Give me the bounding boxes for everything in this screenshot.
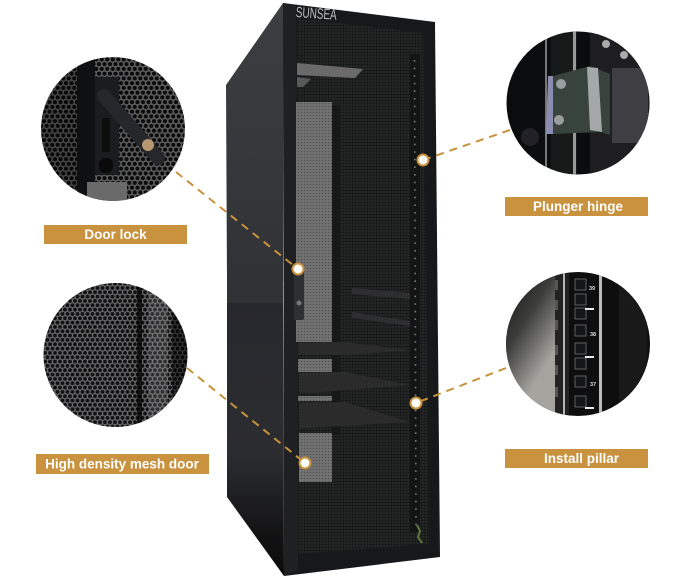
- unit ticks: [585, 308, 594, 409]
- detail circle: install pillar: [506, 272, 650, 416]
- top vent: [297, 63, 363, 78]
- connector: plunger hinge: [418, 130, 510, 166]
- mounting rail: [410, 54, 420, 532]
- cabinet side panel: [226, 3, 284, 576]
- unit numbers: 37: [590, 382, 596, 388]
- connector: install pillar: [410, 368, 506, 408]
- label: high density mesh door: [36, 454, 209, 474]
- detail circle: mesh: [43, 283, 188, 427]
- server cabinet: [226, 3, 440, 576]
- rear perforated panel: [296, 102, 332, 482]
- marker: [410, 398, 422, 408]
- unit numbers: 39: [589, 286, 595, 292]
- label: door lock: [44, 225, 187, 244]
- shelves: [298, 342, 410, 428]
- marker: [292, 264, 304, 274]
- cabinet door frame: [283, 3, 440, 576]
- cable tie: [417, 525, 422, 543]
- unit numbers: 38: [590, 332, 596, 338]
- marker: [418, 154, 428, 166]
- lock handle: [104, 96, 158, 158]
- side slots: [555, 280, 558, 397]
- door mesh interior: [296, 18, 429, 554]
- hinge plate: [553, 66, 610, 135]
- rail holes: [575, 279, 586, 407]
- inner frame: [332, 105, 340, 435]
- door handle: [294, 268, 304, 320]
- label: door lock: Door lock: [84, 227, 147, 242]
- rivet: [142, 139, 154, 151]
- label: install pillar: Install pillar: [544, 451, 620, 466]
- connector: mesh door: [187, 368, 310, 468]
- unit numbers: [589, 286, 596, 388]
- equipment brackets: [352, 288, 410, 326]
- label: plunger hinge: [505, 197, 648, 216]
- marker: [300, 458, 310, 468]
- label: high density mesh door: High density mesh door: [45, 456, 200, 472]
- connector: door lock: [176, 172, 304, 274]
- label: plunger hinge: Plunger hinge: [533, 199, 623, 214]
- detail circle: plunger hinge: [506, 31, 650, 175]
- label: install pillar: [505, 449, 648, 468]
- detail circle: door lock: [41, 57, 185, 201]
- brand logo: SUNSEA: [295, 4, 337, 24]
